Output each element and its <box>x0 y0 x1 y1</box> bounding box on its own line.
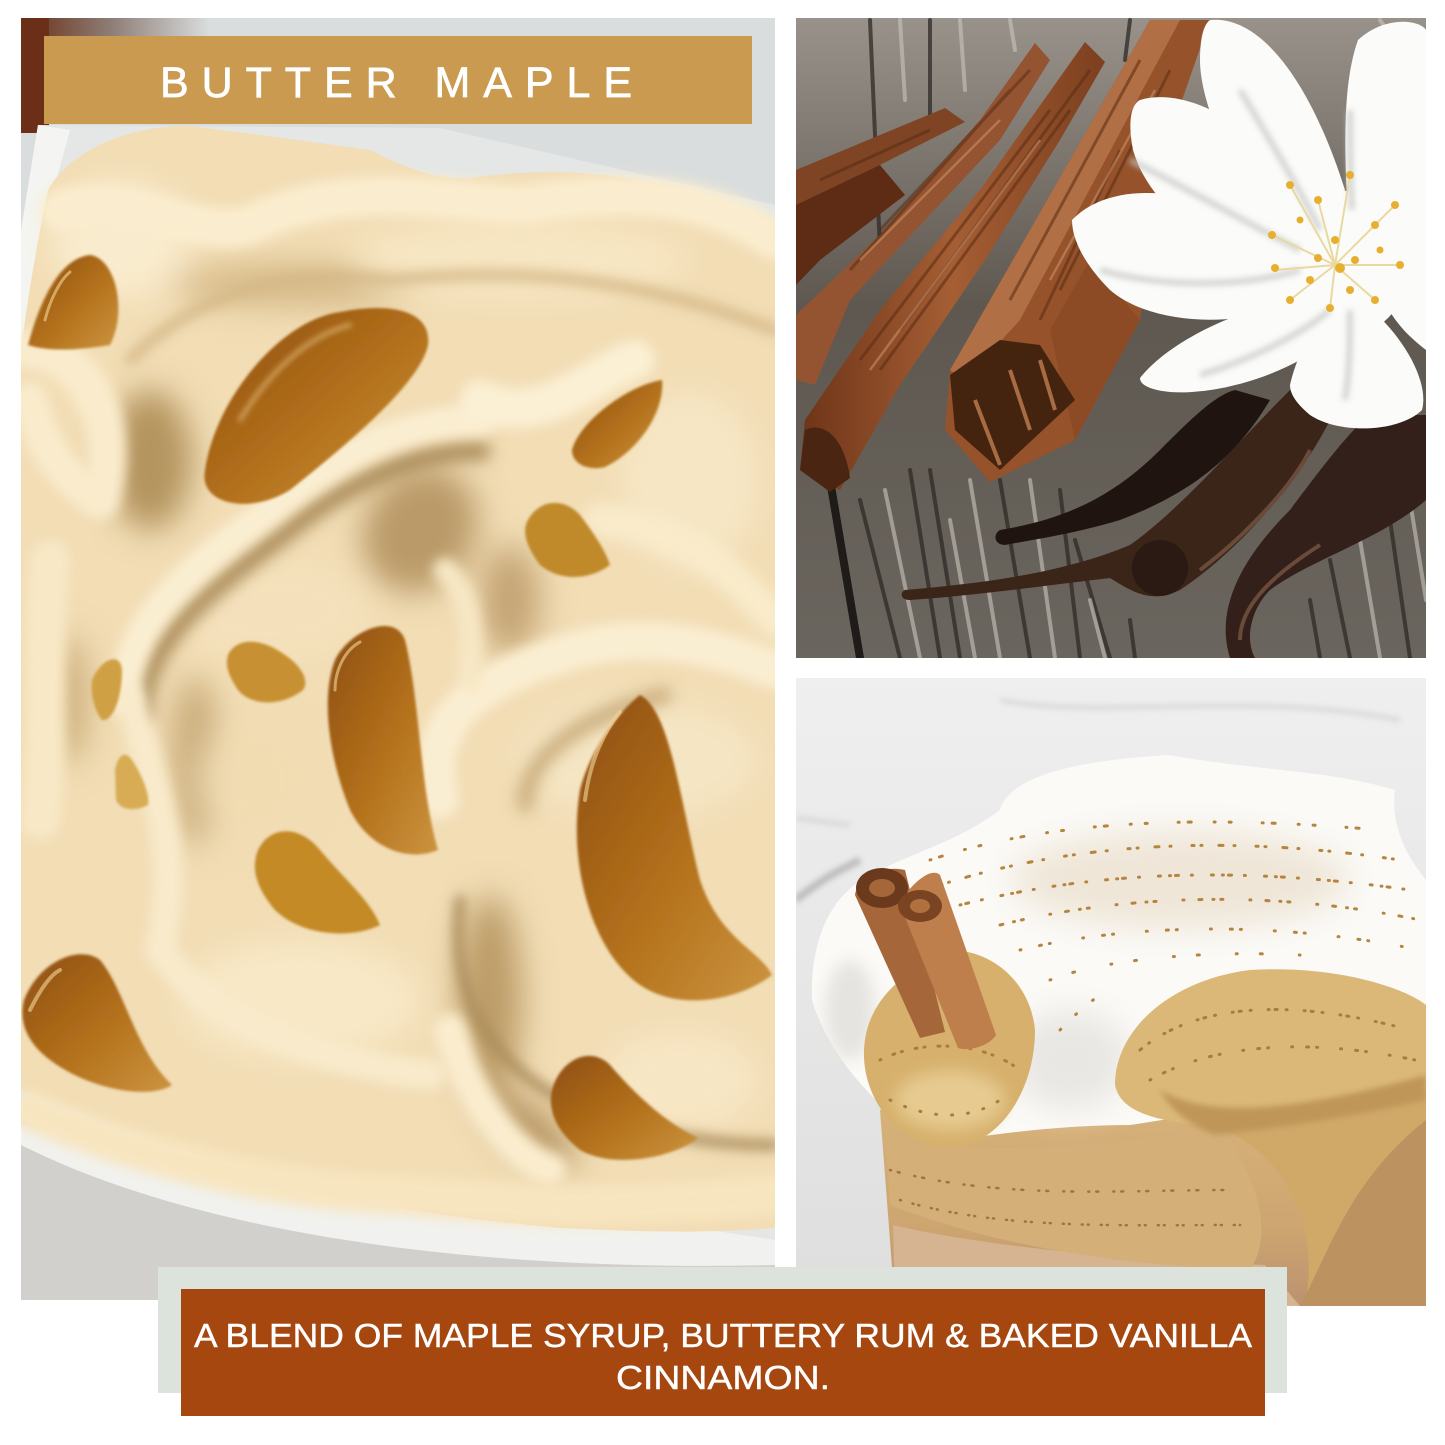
wood planks grain <box>830 20 1426 658</box>
butter shading <box>50 180 760 1184</box>
title banner <box>44 36 752 124</box>
panel: spiced latte photo <box>796 678 1426 1306</box>
tagline banner: CINNAMON. <box>616 1359 830 1396</box>
cup <box>880 1080 1426 1306</box>
icon: white flower <box>1072 20 1426 428</box>
spice speckles <box>880 822 1420 1225</box>
cinnamon sticks <box>796 20 1210 492</box>
cinnamon sticks in cream <box>855 868 996 1049</box>
panel: butter with maple syrup photo <box>21 18 775 1300</box>
maple syrup pools <box>22 255 772 1160</box>
syrup highlights <box>30 272 620 1010</box>
caramel foam <box>864 950 1426 1148</box>
butter folds <box>30 196 775 1205</box>
panel: cinnamon sticks and vanilla photo <box>796 18 1426 658</box>
tagline banner: A BLEND OF MAPLE SYRUP, BUTTERY RUM & BAKED VANILLA <box>194 1317 1252 1354</box>
whipped cream <box>812 755 1426 1145</box>
tagline backing panel <box>158 1267 1287 1393</box>
title banner: BUTTER MAPLE <box>160 59 640 107</box>
tagline banner <box>181 1289 1265 1416</box>
vanilla pods <box>902 390 1426 658</box>
